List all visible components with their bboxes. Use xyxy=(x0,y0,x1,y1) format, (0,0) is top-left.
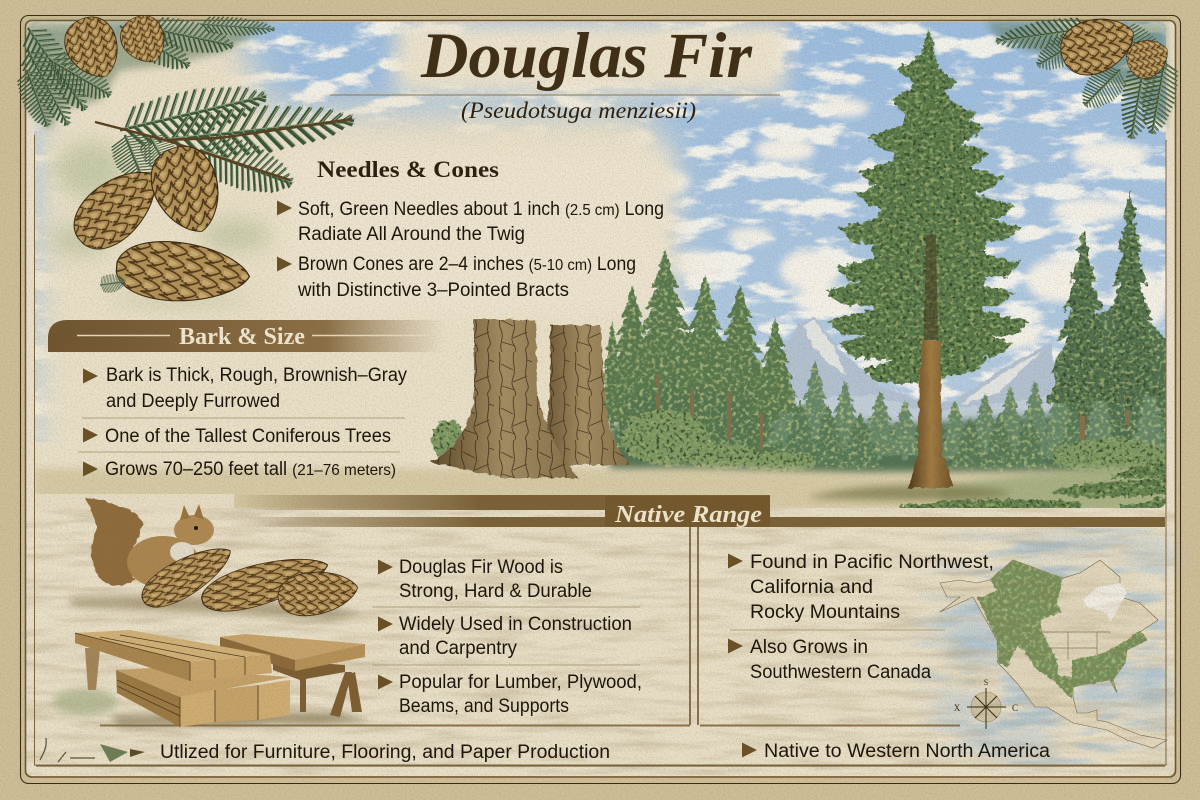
shrubs xyxy=(432,410,1168,473)
top-right pine corner xyxy=(985,7,1182,143)
bottom caption left: Utlized for Furniture, Flooring, and Paper Production xyxy=(160,742,610,763)
bullet: cones: Brown Cones are 2–4 inches (5-10 cm) Long xyxy=(298,254,636,275)
foreground grass xyxy=(900,462,1166,510)
front row of trees xyxy=(778,400,1100,472)
lower beams xyxy=(116,668,290,697)
cones group xyxy=(62,138,251,306)
left trunks xyxy=(656,348,763,450)
bottom rule xyxy=(36,765,1165,767)
compass rose: X xyxy=(954,703,961,713)
ground shadow xyxy=(810,485,1010,500)
panel: bark and size bullets xyxy=(78,365,407,480)
cones pile xyxy=(135,535,361,620)
corner cones xyxy=(57,9,129,87)
compass rose: C xyxy=(1012,703,1018,713)
bullet: lumber: Popular for Lumber, Plywood, xyxy=(399,672,642,693)
ground wash under squirrel and lumber xyxy=(53,595,370,728)
trunk xyxy=(908,340,954,488)
map sea wash xyxy=(930,537,1180,757)
bullet: found in: Rocky Mountains xyxy=(750,602,900,623)
bullet: lumber: Beams, and Supports xyxy=(399,696,569,717)
bullet: canada: Also Grows in xyxy=(750,637,868,658)
bullet: bark xyxy=(83,365,407,412)
bullet: height: Grows 70–250 feet tall (21–76 meters) xyxy=(105,459,396,480)
banner: bark and size xyxy=(48,320,445,352)
title: Douglas Fir xyxy=(420,20,753,92)
paper texture streaks xyxy=(25,508,1175,775)
bullet: found in: California and xyxy=(750,577,873,598)
sawhorse and back planks xyxy=(85,648,100,690)
distant forest band xyxy=(610,415,1166,480)
banner: bark and size: Bark & Size xyxy=(179,324,305,350)
green ground wash xyxy=(940,466,1170,512)
back row of trees xyxy=(762,360,1175,465)
foliage xyxy=(825,28,1030,385)
bullet: wood strength xyxy=(378,557,592,602)
left forest mass xyxy=(616,329,794,456)
stump right xyxy=(547,324,632,466)
needles branch xyxy=(95,73,358,206)
bullet: cones: with Distinctive 3–Pointed Bracts xyxy=(297,280,569,301)
banner: native range xyxy=(230,495,1165,528)
squirrel xyxy=(85,498,214,588)
bullet: tallest: One of the Tallest Coniferous Trees xyxy=(105,426,391,447)
cloud texture xyxy=(34,22,1166,442)
corner foliage mass xyxy=(27,22,270,130)
Hudson Bay xyxy=(1083,583,1127,623)
compass rose xyxy=(954,678,1018,729)
main Douglas fir xyxy=(825,28,1030,488)
needles text backing xyxy=(637,144,680,318)
state borders xyxy=(1042,632,1110,660)
bullet: lumber xyxy=(378,672,642,717)
bullet: wood strength: Douglas Fir Wood is xyxy=(399,557,563,578)
lumber stack xyxy=(75,630,365,727)
title backing xyxy=(395,22,785,94)
cumulus clouds xyxy=(630,99,1168,351)
bullet: bark: and Deeply Furrowed xyxy=(106,391,280,412)
top-left pine corner xyxy=(13,9,276,133)
bullet: construction: Widely Used in Construction xyxy=(399,614,632,635)
bullet: needles xyxy=(277,199,664,245)
native range green xyxy=(977,560,1147,700)
bullet: canada xyxy=(728,637,931,683)
right pair of trees xyxy=(1044,190,1164,440)
mountains xyxy=(783,316,1056,424)
panel: native range text xyxy=(728,552,994,683)
left cluster of trees xyxy=(594,250,802,430)
ground xyxy=(34,467,1166,512)
bullet: needles: Soft, Green Needles about 1 inch (2.5 cm) Long xyxy=(298,199,664,220)
bottom ornament and arrow xyxy=(40,738,145,762)
land xyxy=(940,560,1167,748)
subtitle: (Pseudotsuga menziesii) xyxy=(461,98,696,123)
small conifers xyxy=(594,250,1175,472)
bullet: cones xyxy=(277,254,636,301)
left lower backing xyxy=(34,494,234,514)
stump right bark xyxy=(548,325,628,465)
right forest mass xyxy=(1055,300,1166,470)
bullet: bark: Bark is Thick, Rough, Brownish–Gray xyxy=(106,365,407,386)
corner needles xyxy=(13,11,276,133)
stump left xyxy=(430,320,578,478)
scene: sky, mountains and forest xyxy=(34,22,1175,512)
banner: native range: Native Range xyxy=(614,502,762,528)
map sea streaks xyxy=(906,528,1166,764)
panel: wood uses xyxy=(372,557,642,717)
stump left bark xyxy=(430,320,578,478)
bullet: canada: Southwestern Canada xyxy=(750,662,931,683)
bullet: found in xyxy=(728,552,994,623)
bullet: found in: Found in Pacific Northwest, xyxy=(750,552,994,573)
stumps xyxy=(430,320,632,478)
cream fade over left of sky xyxy=(34,22,670,480)
panel: needles and cones xyxy=(277,157,664,301)
bullet: construction: and Carpentry xyxy=(399,638,517,659)
bullet: wood strength: Strong, Hard & Durable xyxy=(399,581,592,602)
top plank xyxy=(75,630,270,662)
upper trunk shadow xyxy=(924,235,938,340)
bullet: construction xyxy=(378,614,632,659)
bottom caption right: Native to Western North America xyxy=(764,741,1050,762)
moss wash near cones xyxy=(50,142,270,306)
compass rose: S xyxy=(984,678,988,687)
lower panel texture backing xyxy=(34,508,1166,765)
bullet: needles: Radiate All Around the Twig xyxy=(298,224,525,245)
heading: Needles & Cones xyxy=(317,157,499,182)
title rule xyxy=(330,94,780,96)
panel dividers xyxy=(100,527,960,726)
sky xyxy=(34,22,1166,442)
map of North America xyxy=(940,560,1167,748)
